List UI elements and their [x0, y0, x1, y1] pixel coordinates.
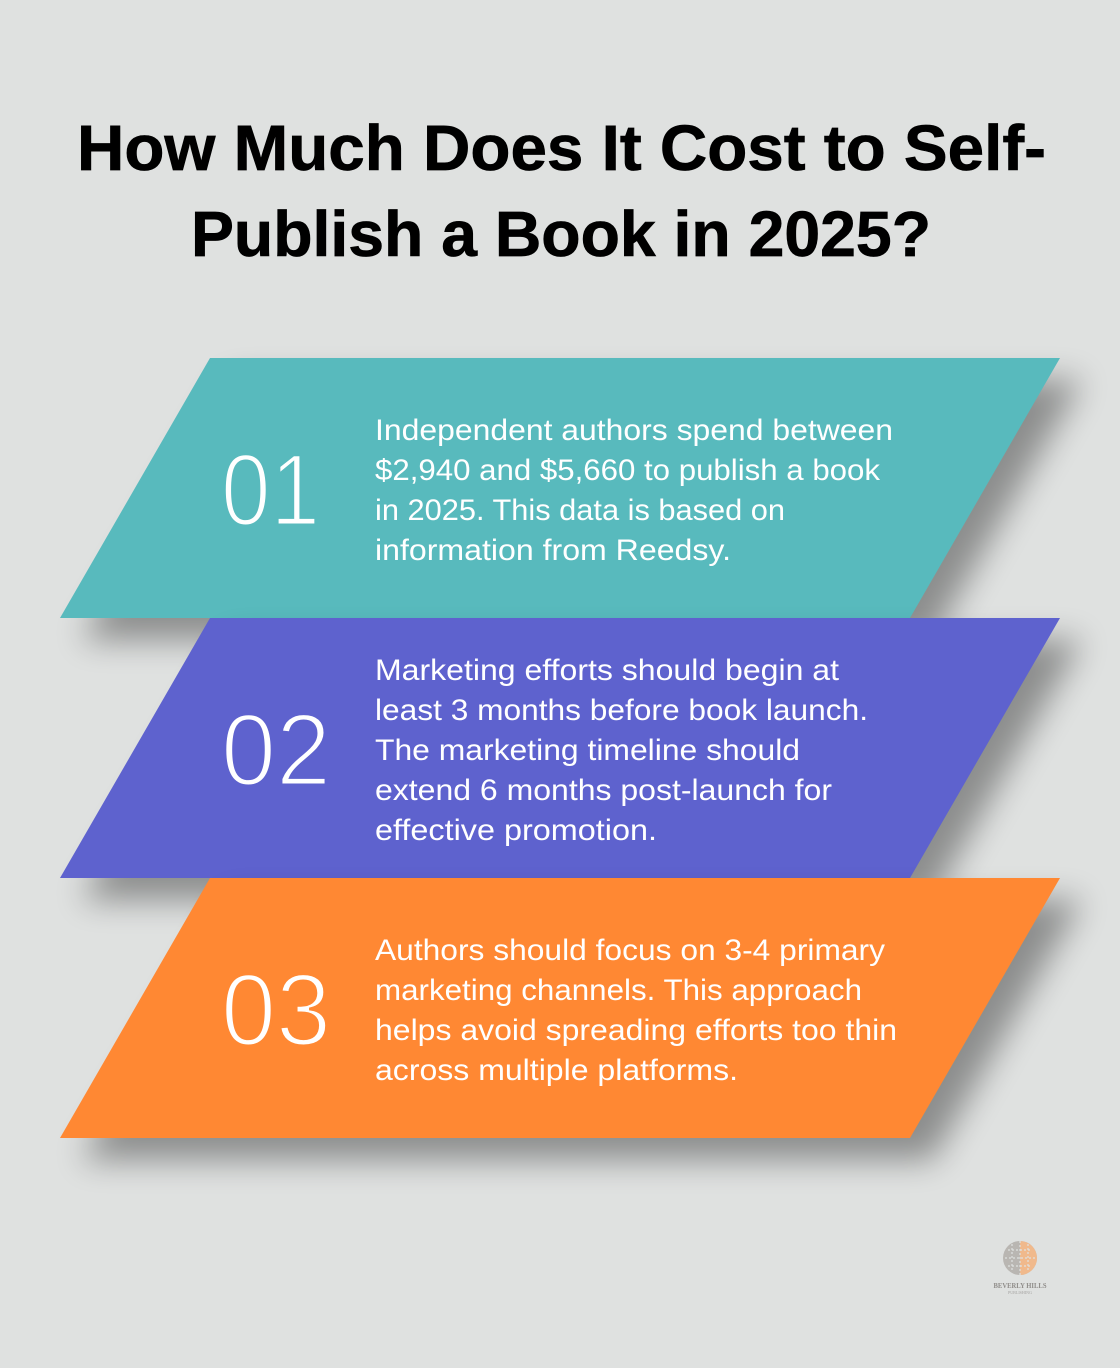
- text: step 02 description: Marketing efforts should begin at: [375, 654, 840, 687]
- title: Publish a Book in 2025?: [191, 198, 931, 270]
- text: step 01 description: information from Reedsy.: [375, 534, 731, 567]
- number 03: 03: [221, 953, 331, 1067]
- text: step 02 description: least 3 months before book launch.: [375, 694, 868, 727]
- panel: step 01: [60, 358, 1082, 640]
- text: step 01 description: $2,940 and $5,660 to publish a book: [375, 454, 881, 487]
- text: step 03 description: Authors should focus on 3-4 primary: [375, 934, 885, 967]
- panel: step 03: [60, 878, 1082, 1160]
- number 02: 02: [221, 693, 331, 807]
- number 01: 01: [221, 433, 320, 547]
- text: step 02 description: effective promotion.: [375, 814, 657, 847]
- text: step 03 description: [375, 934, 897, 1087]
- logo wordmark: BEVERLY HILLS: [994, 1282, 1047, 1290]
- text: step 03 description: across multiple platforms.: [375, 1054, 738, 1087]
- text: step 01 description: [375, 414, 893, 567]
- logo subline: PUBLISHING: [1008, 1290, 1033, 1295]
- text: step 02 description: extend 6 months post-launch for: [375, 774, 832, 807]
- title: How Much Does It Cost to Self-: [77, 112, 1046, 184]
- text: step 02 description: The marketing timeline should: [375, 734, 800, 767]
- logo: Beverly Hills Publishing: [994, 1241, 1047, 1295]
- panel: step 02: [60, 618, 1082, 900]
- text: step 01 description: Independent authors spend between: [375, 414, 893, 447]
- text: step 03 description: helps avoid spreading efforts too thin: [375, 1014, 897, 1047]
- title: [77, 112, 1046, 270]
- icon: logo emblem: [1003, 1241, 1037, 1275]
- text: step 01 description: in 2025. This data is based on: [375, 494, 785, 527]
- text: step 02 description: [375, 654, 868, 847]
- text: step 03 description: marketing channels. This approach: [375, 974, 862, 1007]
